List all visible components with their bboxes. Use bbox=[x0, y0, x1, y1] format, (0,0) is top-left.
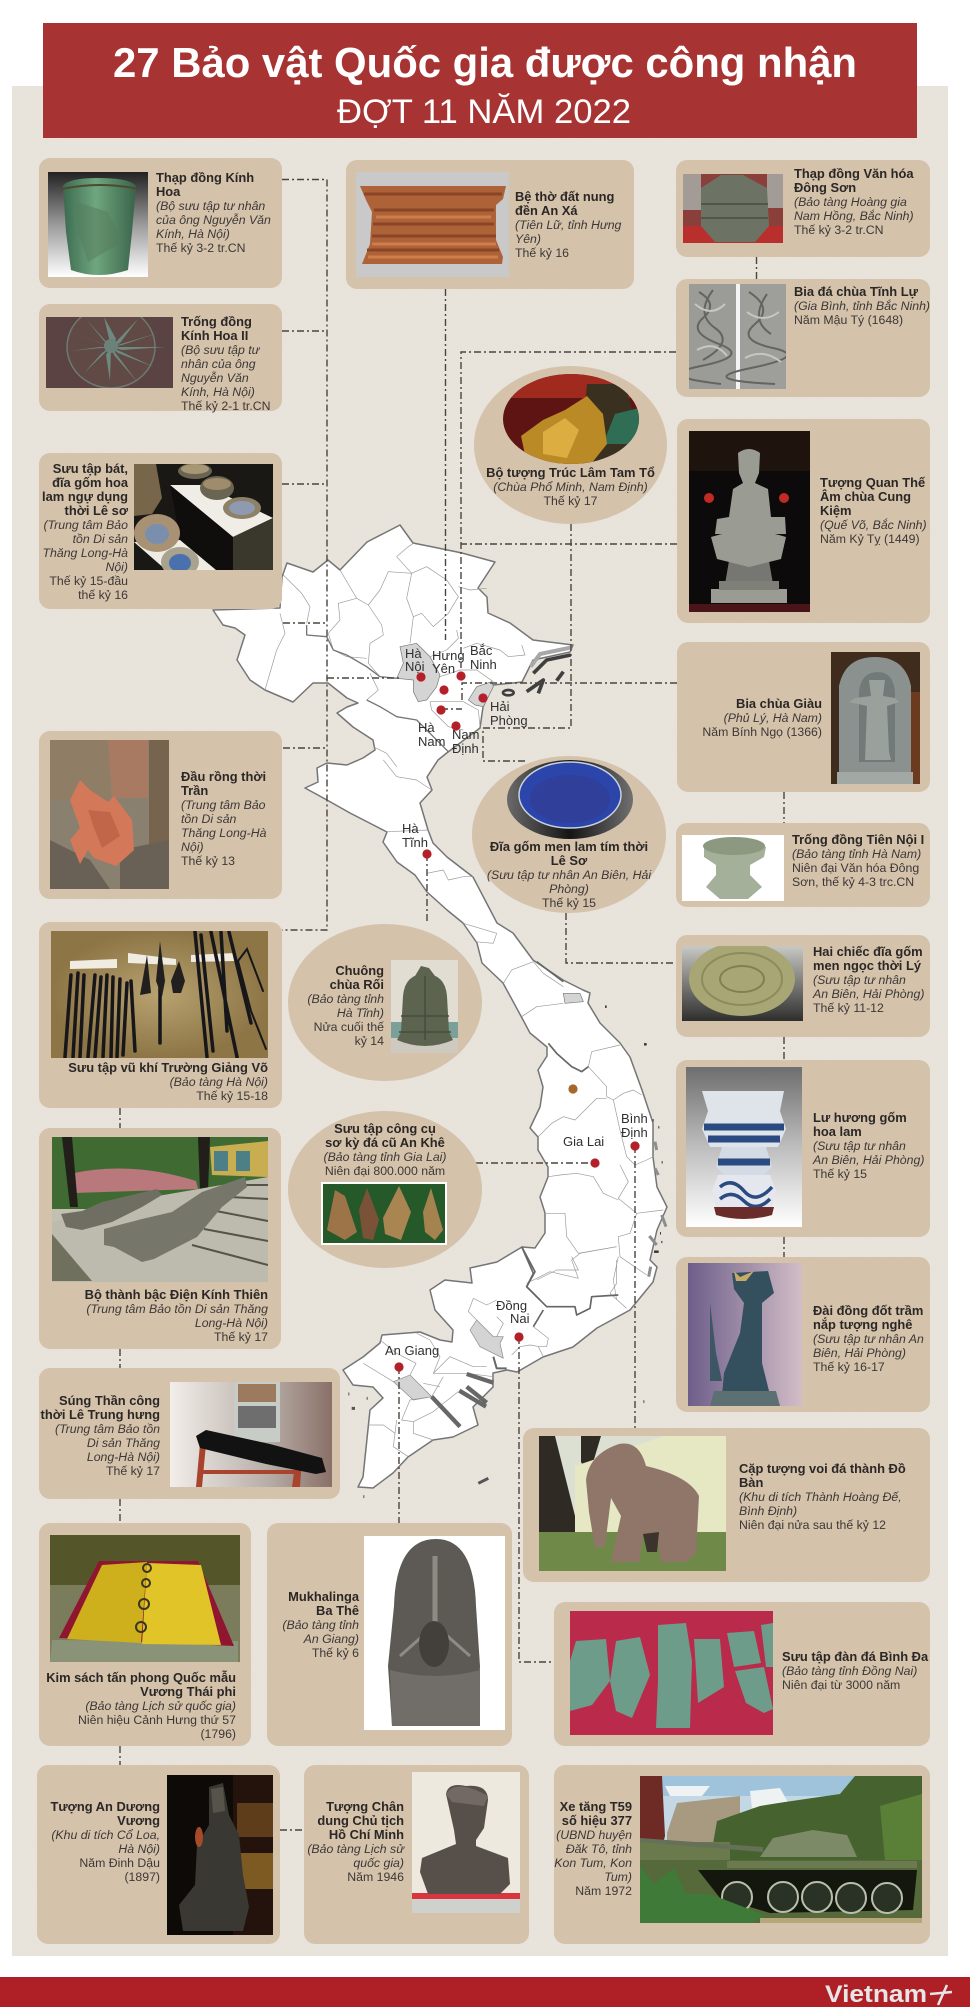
caption: Thế kỷ 3-2 tr.CN bbox=[156, 241, 246, 255]
caption: Niên đại nửa sau thế kỷ 12 bbox=[739, 1518, 886, 1532]
photo: iron weapons bbox=[51, 931, 268, 1058]
caption: Nội) bbox=[181, 840, 204, 854]
caption: (Bảo tàng tỉnh Hà Nam) bbox=[792, 847, 921, 861]
caption bbox=[85, 1287, 268, 1344]
caption: Niên đại 800.000 năm bbox=[325, 1164, 445, 1178]
caption: Sưu tập bát, bbox=[53, 461, 128, 476]
caption: (Sưu tập tư nhân bbox=[813, 973, 906, 987]
map province labels: Gia Lai bbox=[563, 1134, 604, 1149]
caption: quốc gia) bbox=[353, 1856, 404, 1870]
photo: Mukhalinga stone bbox=[364, 1536, 505, 1730]
map location markers bbox=[394, 671, 640, 1372]
caption: Trống đồng Tiên Nội I bbox=[792, 832, 924, 847]
caption bbox=[820, 475, 927, 546]
caption: men ngọc thời Lý bbox=[813, 958, 921, 973]
caption: Vương bbox=[117, 1813, 160, 1828]
photo: blue glazed dish bbox=[507, 760, 633, 839]
panel: Sưu tập bát, đĩa gốm hoa lam bbox=[39, 453, 282, 609]
photo: bronze bust bbox=[412, 1772, 520, 1913]
caption: Thế kỷ 17 bbox=[106, 1464, 160, 1478]
caption: (Trung tâm Bảo bbox=[43, 518, 128, 532]
caption: Thế kỷ 17 bbox=[544, 494, 598, 508]
caption: Chuông bbox=[335, 963, 384, 978]
photo: dragon stairway bbox=[52, 1137, 268, 1282]
caption: (1897) bbox=[124, 1870, 160, 1884]
photo: Guanyin statue bbox=[689, 431, 810, 612]
caption: (Chùa Phổ Minh, Nam Định) bbox=[493, 480, 648, 494]
caption bbox=[702, 696, 822, 739]
caption: Nguyễn Văn bbox=[181, 371, 249, 385]
caption: Súng Thần công bbox=[59, 1393, 160, 1408]
caption: Hà Nội) bbox=[118, 1842, 160, 1856]
caption: Bia chùa Giàu bbox=[736, 696, 822, 711]
caption: (Trung tâm Bảo bbox=[181, 798, 266, 812]
caption: (Gia Bình, tỉnh Bắc Ninh) bbox=[794, 299, 930, 313]
map province labels: Nam bbox=[452, 727, 479, 742]
caption: (Sưu tập tư nhân bbox=[813, 1139, 906, 1153]
map province labels: Hà bbox=[405, 646, 422, 661]
caption: Mukhalinga bbox=[288, 1589, 359, 1604]
connector lines bbox=[120, 180, 784, 1830]
photo: T59 tank bbox=[640, 1776, 922, 1923]
photo: terracotta altar bbox=[356, 172, 509, 277]
panel: Đĩa gốm men lam tím bbox=[472, 756, 666, 913]
caption bbox=[307, 963, 384, 1048]
photo: bronze bell bbox=[391, 960, 458, 1053]
caption: hoa lam bbox=[813, 1124, 862, 1139]
panel: Sưu tập công cụ sơ kỳ đá cũ An Khê bbox=[288, 1111, 482, 1268]
caption: Vương Thái phi bbox=[140, 1684, 236, 1699]
caption bbox=[307, 1800, 404, 1884]
caption: (Bảo tàng Hà Nội) bbox=[170, 1075, 268, 1089]
caption bbox=[323, 1121, 447, 1178]
panel: Bia đá chùa Tĩnh Lự bbox=[676, 279, 930, 397]
caption: nắp tượng nghê bbox=[813, 1317, 912, 1332]
caption: tồn Di sản bbox=[181, 812, 236, 826]
panel: Mukhalinga Ba Thê bbox=[267, 1523, 512, 1746]
caption: sơ kỳ đá cũ An Khê bbox=[325, 1135, 445, 1150]
subtitle: ĐỢT 11 NĂM 2022 bbox=[337, 93, 631, 131]
title heading: 27 Bảo vật Quốc gia được công nhận bbox=[113, 39, 857, 86]
map province labels: Bắc bbox=[470, 643, 493, 658]
caption: Sưu tập công cụ bbox=[334, 1121, 436, 1136]
caption: Cặp tượng voi đá thành Đồ bbox=[739, 1461, 906, 1476]
caption: Năm Mậu Tý (1648) bbox=[794, 313, 903, 327]
caption bbox=[812, 944, 924, 1015]
caption bbox=[794, 166, 914, 237]
map province labels: Hải bbox=[490, 699, 510, 714]
caption: Kính, Hà Nội) bbox=[181, 385, 255, 399]
caption: Biên, Hải Phòng) bbox=[813, 1346, 906, 1360]
caption: An Biên, Hải Phòng) bbox=[813, 987, 924, 1001]
photo: golden book bbox=[50, 1535, 240, 1662]
caption: Thế kỷ 2-1 tr.CN bbox=[181, 399, 271, 413]
caption: Bộ tượng Trúc Lâm Tam Tổ bbox=[486, 465, 655, 480]
caption: Xe tăng T59 bbox=[560, 1799, 632, 1814]
caption: (Phủ Lý, Hà Nam) bbox=[724, 711, 822, 725]
caption bbox=[68, 1060, 268, 1103]
caption: Tượng An Dương bbox=[50, 1799, 160, 1814]
caption: Trống đồng bbox=[181, 314, 252, 329]
caption: thế kỷ 16 bbox=[78, 588, 128, 602]
caption: (UBND huyện bbox=[556, 1828, 632, 1842]
title banner bbox=[43, 23, 917, 138]
caption: Hai chiếc đĩa gốm bbox=[813, 944, 923, 959]
photo: stone elephant bbox=[539, 1436, 726, 1571]
caption: Thế kỷ 16 bbox=[515, 246, 569, 260]
caption bbox=[40, 1393, 160, 1478]
caption: Bàn bbox=[739, 1475, 763, 1490]
caption: (Bộ sưu tập tư nhân bbox=[156, 199, 265, 213]
caption: Lư hương gốm bbox=[813, 1110, 907, 1125]
caption: Bệ thờ đất nung bbox=[515, 189, 614, 204]
caption: Kính Hoa II bbox=[181, 328, 248, 343]
panel: Kim sách tấn phong Quốc mẫu bbox=[39, 1523, 251, 1746]
caption: Lê Sơ bbox=[551, 853, 587, 868]
caption: Hồ Chí Minh bbox=[329, 1827, 404, 1842]
logo: Vietnam+ bbox=[815, 1977, 970, 2007]
map province labels: Ninh bbox=[470, 657, 497, 672]
photo: stone tools bbox=[321, 1182, 447, 1245]
caption: số hiệu 377 bbox=[562, 1813, 632, 1828]
photo: cannon on stand bbox=[170, 1382, 332, 1487]
caption: Long-Hà Nội) bbox=[195, 1316, 268, 1330]
caption: Tum) bbox=[604, 1870, 632, 1884]
caption: (1796) bbox=[200, 1727, 236, 1741]
caption bbox=[181, 314, 271, 413]
panel: Thạp đồng Kính Hoa bbox=[39, 158, 282, 288]
photo: bronze jar bbox=[48, 172, 148, 277]
caption: Thế kỷ 17 bbox=[214, 1330, 268, 1344]
caption bbox=[515, 189, 622, 260]
caption: Thế kỷ 15-18 bbox=[196, 1089, 268, 1103]
photo: celadon plate bbox=[682, 946, 803, 1021]
caption: Nửa cuối thế bbox=[314, 1020, 384, 1034]
caption: Di sản Thăng bbox=[87, 1436, 160, 1450]
caption: Tượng Quan Thế bbox=[820, 475, 925, 490]
caption bbox=[46, 1671, 236, 1741]
caption: Năm 1972 bbox=[575, 1884, 632, 1898]
caption: Thế kỷ 15 bbox=[542, 896, 596, 910]
caption bbox=[794, 284, 930, 327]
photo: green stone slabs bbox=[570, 1611, 773, 1735]
caption: Năm 1946 bbox=[347, 1870, 404, 1884]
caption: tồn Di sản bbox=[73, 532, 128, 546]
caption: (Sưu tập tư nhân An bbox=[813, 1332, 924, 1346]
caption: chùa Rối bbox=[330, 977, 384, 992]
caption: Sưu tập vũ khí Trường Giảng Võ bbox=[68, 1060, 268, 1075]
caption: Thế kỷ 13 bbox=[181, 854, 235, 868]
caption: Long-Hà Nội) bbox=[87, 1450, 160, 1464]
map of Vietnam bbox=[213, 525, 667, 1497]
photo: bronze drum face bbox=[46, 317, 173, 388]
panel: Bộ tượng Trúc Lâm Tam Tổ bbox=[474, 366, 667, 524]
caption: Thế kỷ 15-đầu bbox=[49, 574, 128, 588]
caption: Thế kỷ 6 bbox=[312, 1646, 359, 1660]
map province labels: Bình bbox=[621, 1111, 648, 1126]
caption: lam ngự dụng bbox=[42, 489, 128, 504]
photo: blue and white incense burner bbox=[686, 1067, 802, 1227]
panel: Tượng An Dương Vương bbox=[37, 1765, 280, 1944]
caption: (Sưu tập tư nhân An Biên, Hải bbox=[487, 868, 651, 882]
caption: dung Chủ tịch bbox=[317, 1813, 404, 1828]
caption: (Bảo tàng tỉnh Đồng Nai) bbox=[782, 1664, 917, 1678]
caption: Thạp đồng Kính bbox=[156, 170, 254, 185]
caption: Thế kỷ 3-2 tr.CN bbox=[794, 223, 884, 237]
caption bbox=[739, 1462, 906, 1532]
caption: kỷ 14 bbox=[355, 1034, 384, 1048]
caption: Yên) bbox=[515, 232, 541, 246]
caption: Đĩa gốm men lam tím thời bbox=[490, 839, 648, 854]
caption: Thăng Long-Hà bbox=[43, 546, 128, 560]
caption: (Quế Võ, Bắc Ninh) bbox=[820, 518, 927, 532]
caption: Thạp đồng Văn hóa bbox=[794, 166, 914, 181]
panel: Hai chiếc đĩa gốm men ngọc thời Lý bbox=[676, 935, 930, 1037]
caption: của ông Nguyễn Văn bbox=[156, 213, 271, 227]
panel: Bộ thành bậc Điện Kính Thiên bbox=[39, 1128, 281, 1349]
caption: (Bộ sưu tập tư bbox=[181, 343, 259, 357]
caption: nhân của ông bbox=[181, 357, 256, 371]
panel: Lư hương gốm hoa lam bbox=[676, 1060, 930, 1237]
map province labels: Định bbox=[452, 741, 479, 756]
caption bbox=[181, 769, 266, 868]
caption: Đài đồng đốt trầm bbox=[813, 1303, 923, 1318]
photo: Dong Son jar bbox=[683, 174, 783, 243]
map province labels: An Giang bbox=[385, 1343, 439, 1358]
caption: thời Lê sơ bbox=[65, 503, 128, 518]
caption bbox=[782, 1650, 928, 1692]
photo: small bronze drum bbox=[682, 835, 784, 901]
map province labels: Hưng bbox=[432, 648, 465, 663]
caption: Thế kỷ 11-12 bbox=[813, 1001, 884, 1015]
panel: Súng Thần công thời Lê Trung hưng bbox=[39, 1368, 340, 1499]
caption: Bình Định) bbox=[739, 1504, 797, 1518]
caption: Kính, Hà Nội) bbox=[156, 227, 230, 241]
footer bar bbox=[0, 1977, 970, 2007]
caption bbox=[487, 839, 652, 910]
caption: Năm Kỷ Tỵ (1449) bbox=[820, 532, 920, 546]
caption: Niên hiệu Cảnh Hưng thứ 57 bbox=[78, 1713, 236, 1727]
caption: Năm Bính Ngọ (1366) bbox=[702, 725, 822, 739]
caption: An Giang) bbox=[304, 1632, 359, 1646]
caption: Sưu tập đàn đá Bình Đa bbox=[782, 1649, 928, 1664]
caption: Đăk Tô, tỉnh bbox=[566, 1842, 632, 1856]
caption: Thế kỷ 15 bbox=[813, 1167, 867, 1181]
map province labels: Định bbox=[621, 1125, 648, 1140]
caption: (Bảo tàng Lịch sử bbox=[307, 1842, 404, 1856]
map province labels: Yên bbox=[432, 661, 455, 676]
caption: (Khu di tích Cổ Loa, bbox=[51, 1828, 160, 1842]
map province labels: Hà bbox=[402, 821, 419, 836]
panel: Tượng Chân dung Chủ tịch Hồ Chí Minh bbox=[304, 1765, 529, 1944]
caption: đền An Xá bbox=[515, 203, 578, 218]
caption: thời Lê Trung hưng bbox=[41, 1407, 160, 1422]
caption: Niên đại Văn hóa Đông bbox=[792, 861, 919, 875]
panel: Sưu tập đàn đá Bình Đa bbox=[554, 1602, 930, 1746]
caption: Nam Hồng, Bắc Ninh) bbox=[794, 209, 914, 223]
caption: An Biên, Hải Phòng) bbox=[813, 1153, 924, 1167]
caption: Năm Đinh Dậu bbox=[79, 1856, 160, 1870]
caption bbox=[50, 1800, 160, 1884]
panel: Đài đồng đốt trầm nắp tượng nghê bbox=[676, 1257, 930, 1412]
caption: Kon Tum, Kon bbox=[554, 1856, 632, 1870]
photo: stone stele with figure bbox=[831, 652, 920, 784]
panel: Xe tăng T59 số hiệu 377 bbox=[554, 1765, 930, 1944]
map province labels: Nai bbox=[510, 1311, 530, 1326]
photo: ceramic bowls display bbox=[134, 464, 273, 570]
caption bbox=[812, 1110, 924, 1181]
photo: terracotta dragon head bbox=[50, 740, 169, 889]
map province labels: Phòng bbox=[490, 713, 528, 728]
caption: Bia đá chùa Tĩnh Lự bbox=[794, 284, 918, 299]
photo: bronze mythical beast bbox=[688, 1263, 802, 1406]
caption: (Bảo tàng Hoàng gia bbox=[794, 195, 907, 209]
map province labels: Hà bbox=[418, 720, 435, 735]
panel: Đầu rồng thời Trần bbox=[39, 731, 282, 899]
caption: Kim sách tấn phong Quốc mẫu bbox=[46, 1670, 236, 1685]
caption: Trần bbox=[181, 783, 208, 798]
caption: Phòng) bbox=[549, 882, 589, 896]
caption: Kiệm bbox=[820, 503, 852, 518]
caption bbox=[42, 461, 128, 602]
panel: Bia chùa Giàu bbox=[677, 642, 930, 792]
map province labels: Tĩnh bbox=[402, 835, 428, 850]
caption: (Bảo tàng Lịch sử quốc gia) bbox=[85, 1699, 236, 1713]
caption bbox=[554, 1800, 632, 1898]
caption bbox=[813, 1303, 924, 1374]
caption: Đầu rồng thời bbox=[181, 769, 266, 784]
caption: Niên đại từ 3000 năm bbox=[782, 1678, 900, 1692]
caption: (Bảo tàng tỉnh bbox=[307, 992, 384, 1006]
caption: Ba Thê bbox=[316, 1603, 359, 1618]
caption: (Bảo tàng tỉnh Gia Lai) bbox=[323, 1150, 447, 1164]
caption: Hà Tĩnh) bbox=[337, 1006, 384, 1020]
caption: (Trung tâm Bảo tồn Di sản Thăng bbox=[86, 1302, 268, 1316]
panel: Trống đồng Tiên Nội I bbox=[676, 823, 930, 907]
caption: Thế kỷ 16-17 bbox=[813, 1360, 885, 1374]
caption: Bộ thành bậc Điện Kính Thiên bbox=[85, 1287, 268, 1302]
caption: Sơn, thế kỷ 4-3 trc.CN bbox=[792, 875, 914, 889]
panel: Bệ thờ đất nung bbox=[346, 160, 634, 289]
map province labels: Đồng bbox=[496, 1298, 527, 1313]
caption: Nội) bbox=[105, 560, 128, 574]
panel: Cặp tượng voi đá thành Đồ Bàn bbox=[523, 1428, 930, 1582]
panel: Tượng Quan Thế Âm chùa Cung Kiệm bbox=[677, 419, 930, 623]
caption: Thăng Long-Hà bbox=[181, 826, 266, 840]
caption: (Khu di tích Thành Hoàng Đế, bbox=[739, 1490, 902, 1504]
panel: Thạp đồng Văn hóa Đông Sơn bbox=[676, 160, 930, 257]
caption bbox=[282, 1590, 359, 1660]
caption bbox=[486, 465, 655, 508]
photo: golden reclining statue bbox=[503, 374, 639, 464]
photo: An Duong Vuong statue bbox=[167, 1775, 273, 1935]
caption: Âm chùa Cung bbox=[820, 489, 911, 504]
caption: (Bảo tàng tỉnh bbox=[282, 1618, 359, 1632]
map province labels bbox=[385, 643, 648, 1358]
caption: (Trung tâm Bảo tồn bbox=[55, 1422, 160, 1436]
caption: Hoa bbox=[156, 184, 180, 199]
panel: Trống đồng Kính Hoa II bbox=[39, 304, 282, 411]
map province labels: Nội bbox=[405, 659, 425, 674]
panel: Sưu tập vũ khí Trường Giảng Võ bbox=[39, 922, 282, 1108]
caption: Tượng Chân bbox=[326, 1799, 404, 1814]
map province labels: Nam bbox=[418, 734, 445, 749]
caption: Đông Sơn bbox=[794, 180, 856, 195]
caption bbox=[792, 832, 924, 889]
panel: Chuông chùa Rối bbox=[288, 924, 482, 1081]
caption: (Tiên Lữ, tỉnh Hưng bbox=[515, 218, 621, 232]
photo: carved stone stele bbox=[689, 284, 786, 389]
caption bbox=[156, 170, 271, 255]
caption: đĩa gốm hoa bbox=[52, 475, 128, 490]
